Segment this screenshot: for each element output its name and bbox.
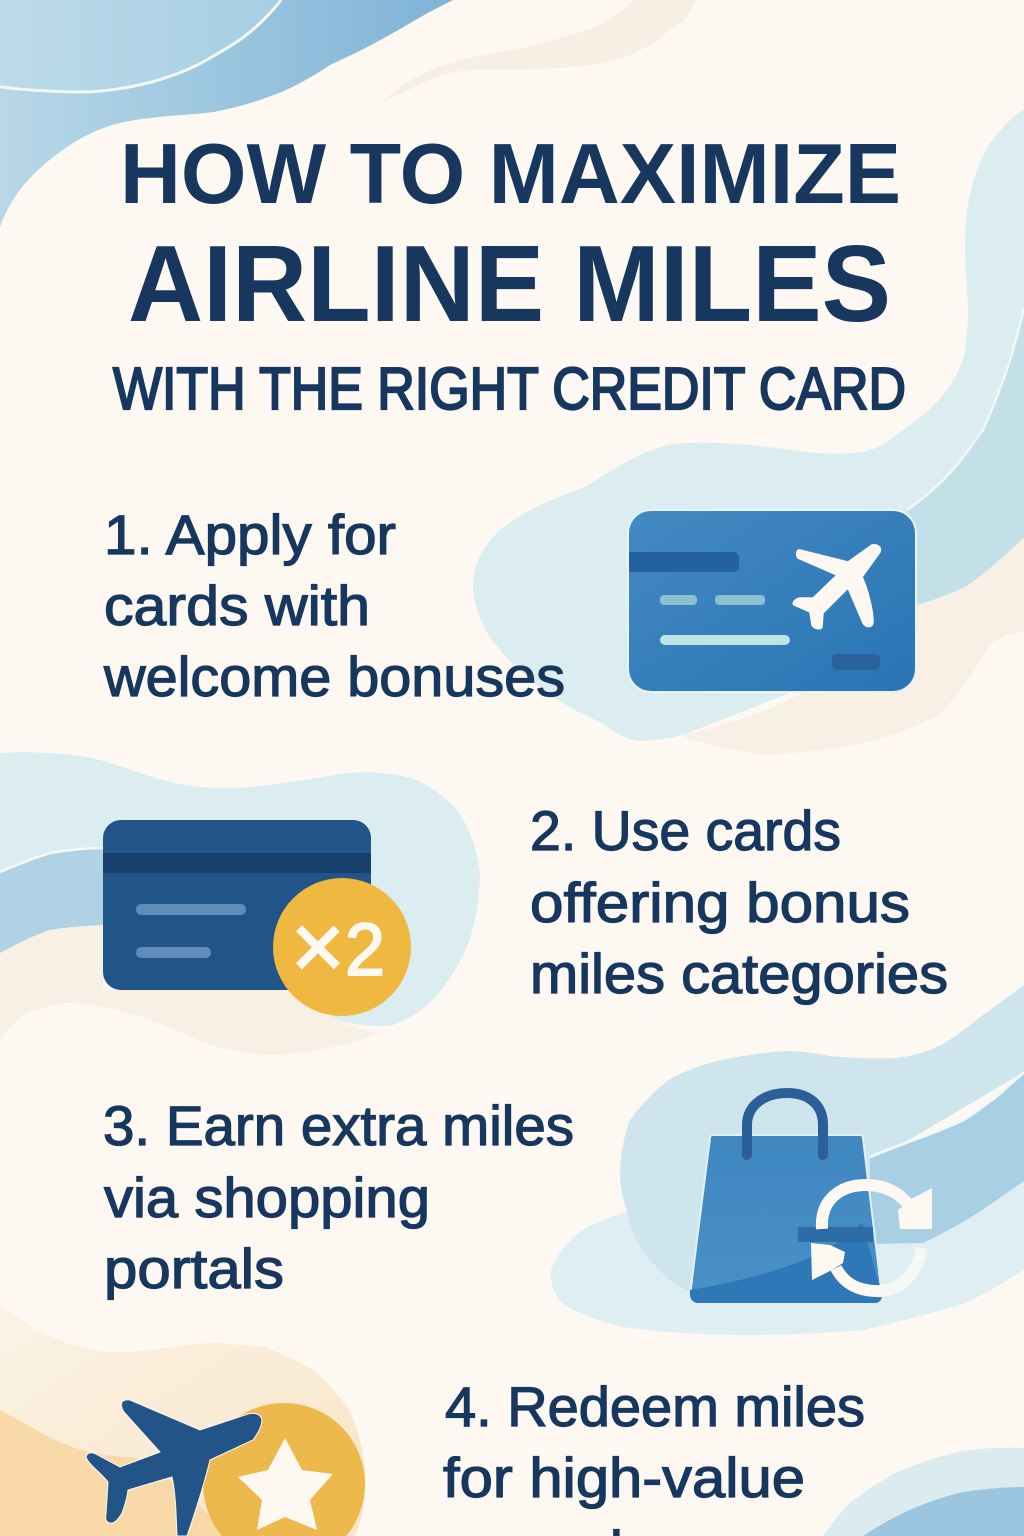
- step 3 text: [103, 1094, 574, 1300]
- card body: [103, 820, 371, 990]
- step 2 text: miles categories: [530, 942, 948, 1005]
- plane: [86, 1400, 262, 1536]
- step 2 text: 2. Use cards: [530, 799, 841, 862]
- icon: plane with star badge: [86, 1400, 365, 1536]
- step 4 text: for high-value: [443, 1446, 805, 1509]
- x2 label: 2: [345, 908, 385, 991]
- title: [113, 127, 906, 422]
- card chip: [832, 654, 880, 670]
- x2 label: ×: [291, 896, 345, 998]
- card line: [660, 635, 790, 645]
- card stripe: [629, 552, 739, 572]
- x2 badge: [273, 878, 411, 1016]
- step 3 text: portals: [104, 1237, 284, 1300]
- bag body: [690, 1135, 882, 1303]
- bag shade: [690, 1222, 882, 1303]
- bag strap: [798, 1227, 873, 1242]
- step 2 text: [530, 799, 948, 1005]
- step 4 text: [443, 1375, 865, 1536]
- title line 3: WITH THE RIGHT CREDIT CARD: [113, 356, 906, 422]
- step 2 text: offering bonus: [530, 871, 910, 934]
- card stripe: [103, 853, 371, 873]
- card lines: [136, 904, 246, 958]
- icon: plane: [793, 545, 880, 629]
- step 1 text: welcome bonuses: [103, 645, 565, 708]
- step 1 text: [103, 503, 565, 708]
- step 4 text: 4. Redeem miles: [445, 1375, 865, 1438]
- star badge: [203, 1403, 365, 1536]
- step 1 text: cards with: [104, 574, 370, 637]
- icon: shopping bag with refresh arrows: [690, 1093, 932, 1303]
- icon: card with x2 badge: [103, 820, 411, 1016]
- step 3 text: 3. Earn extra miles: [103, 1094, 574, 1157]
- step 3 text: via shopping: [104, 1166, 430, 1229]
- card dashes: [660, 595, 765, 605]
- refresh arrows: [811, 1185, 932, 1291]
- title line 1: HOW TO MAXIMIZE: [120, 127, 901, 222]
- bag handle: [747, 1093, 823, 1155]
- title line 2: AIRLINE MILES: [128, 223, 891, 345]
- icon: credit card with plane: [627, 509, 917, 693]
- card body: [629, 511, 915, 691]
- star: [238, 1438, 333, 1530]
- step 1 text: 1. Apply for: [104, 503, 396, 566]
